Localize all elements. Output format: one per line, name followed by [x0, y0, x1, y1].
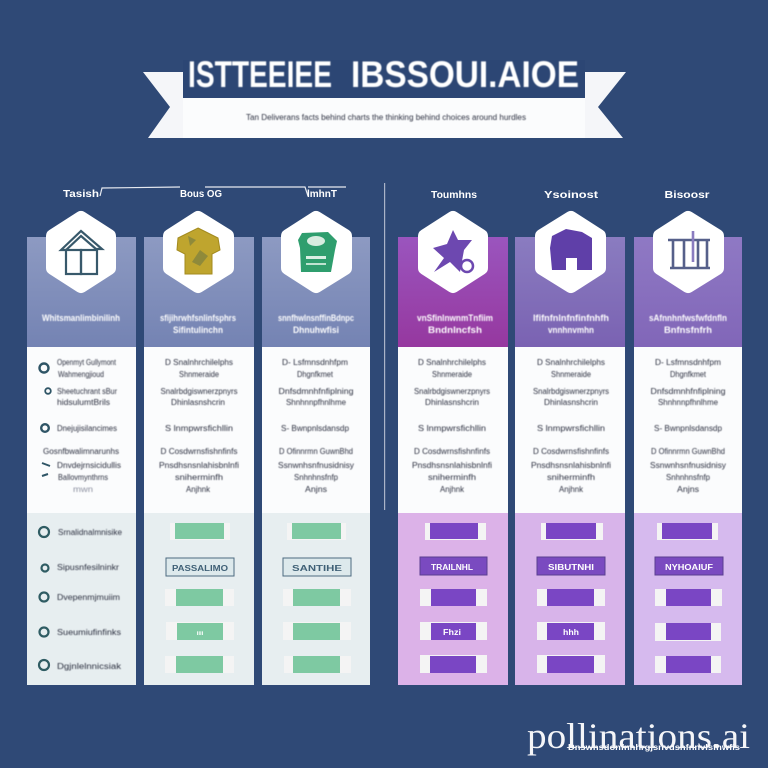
title ribbon: [143, 54, 626, 138]
title: ISTTEEIEE: [188, 54, 332, 95]
bullet text: [531, 358, 611, 494]
bullet text: Ssnwnhsnfnusidnisy: [650, 461, 726, 470]
header band: [27, 237, 136, 347]
bullet text: sniherminfh: [547, 473, 595, 482]
white panel: [398, 347, 508, 514]
row labels: Sipusnfesilninkr: [57, 563, 119, 572]
bullets: [40, 364, 51, 476]
icon: house: [61, 231, 102, 274]
bullet text: Ballovmynthrns: [58, 473, 108, 482]
bullet text: Snalrbdgiswnerzpnyrs: [160, 387, 238, 396]
hexagon: [288, 218, 345, 286]
bullet text: D Snalnhrchilelphs: [537, 358, 605, 367]
column 3: Dhnuhwfisi: [293, 325, 339, 335]
bullet text: Dnvdejrnsicidullis: [57, 461, 121, 470]
bullet text: D Cosdwrnsfishnfinfs: [160, 447, 238, 456]
hexagon: [660, 218, 717, 286]
bullet text: [43, 358, 121, 494]
icon: columns: [668, 231, 710, 268]
header band: [262, 237, 370, 347]
white panel: [634, 347, 742, 514]
header band: [144, 237, 254, 347]
bullet text: Snhnhnsfnfp: [666, 473, 711, 482]
bullet text: Dhinlasnshcrin: [425, 398, 479, 407]
bullet text: D- Lsfmnsdnhfpm: [282, 358, 348, 367]
bullet text: [278, 358, 354, 494]
header band: [398, 237, 508, 347]
band text: snnfhwlnsnffinBdnpc: [278, 313, 354, 323]
column headings: Toumhns: [431, 190, 477, 201]
rating pills: Fhzi: [443, 628, 461, 637]
white panel: [262, 347, 370, 514]
white panel: [515, 347, 625, 514]
bullet text: Dhinlasnshcrin: [544, 398, 598, 407]
bullet text: D Ofinnrmn GuwnBhd: [651, 447, 725, 456]
icon: green device: [298, 232, 337, 272]
icon: gold shirt: [177, 228, 220, 274]
bullet text: mwn: [73, 485, 93, 494]
hexagon: [170, 218, 227, 286]
column headings: Ysoinost: [544, 190, 599, 201]
hexagon: [53, 218, 109, 286]
bullet text: S lnmpwrsfichllin: [165, 424, 233, 433]
hexagon: [542, 218, 599, 286]
hexagon: [425, 218, 481, 286]
band text: sfijihrwhfsnlinfsphrs: [160, 313, 236, 323]
comparison panel: [634, 513, 742, 685]
bullet text: Dhgnfkmet: [297, 370, 334, 379]
bullet text: Dhinlasnshcrin: [171, 398, 225, 407]
rating pills: NYHOAIUF: [665, 563, 713, 572]
column 5: [515, 218, 625, 685]
connector line over left headings: [100, 187, 346, 196]
ribbon left tail: [143, 72, 183, 138]
comparison panel: [262, 513, 370, 685]
column 4: [398, 218, 508, 685]
divider between groups: [384, 183, 385, 510]
rating pills: PASSALIMO: [172, 564, 228, 573]
bullet text: [159, 358, 239, 494]
column headings: Bous OG: [180, 189, 222, 200]
bullet text: Anjhnk: [186, 485, 211, 494]
bullet text: Snalrbdgiswnerzpnyrs: [533, 387, 609, 396]
bullet text: Shnhnnpfhnlhme: [658, 398, 719, 407]
bullet text: D Snalnhrchilelphs: [418, 358, 486, 367]
bullet text: [650, 358, 726, 494]
column 2: Sifintulinchn: [173, 325, 223, 335]
rating pills: SANTIHE: [292, 564, 343, 573]
white panel: [27, 347, 136, 514]
band text: vnSfinlnwnmTnfiim: [417, 313, 493, 323]
bullet text: Shnmeraide: [551, 370, 592, 379]
comparison panel: [398, 513, 508, 685]
bullet text: Ssnwnhsnfnusidnisy: [278, 461, 354, 470]
header band: [634, 237, 742, 347]
bullet text: Dnfsdmnhfnfiplning: [278, 387, 354, 396]
band text: Whitsmanlimbinilinh: [42, 313, 120, 323]
comparison panel: [27, 513, 136, 685]
header band: [515, 237, 625, 347]
rating pills: [655, 523, 723, 673]
row labels: Srnalidnalmnisike: [58, 528, 123, 537]
column headings: lmhnT: [307, 189, 337, 200]
bullet text: Gosnfbwalimnarunhs: [43, 447, 119, 456]
title: IBSSOUI.AIOE: [351, 54, 579, 95]
white panel: [144, 347, 254, 514]
row labels: Sueumiufinfinks: [57, 628, 121, 637]
ribbon body: [183, 98, 585, 138]
bullet text: Dhgnfkmet: [670, 370, 707, 379]
bullet text: Snhnhnsfnfp: [294, 473, 339, 482]
bullet text: Shnmeraide: [432, 370, 473, 379]
bullet text: Anjhnk: [559, 485, 584, 494]
bullet text: Anjns: [305, 485, 327, 494]
rating pills: hhh: [563, 628, 579, 637]
bullet text: S lnmpwrsfichllin: [537, 424, 605, 433]
bullet text: Openmyt Gullymont: [57, 358, 117, 367]
row bullets: [39, 527, 49, 670]
watermark: pollinations.ai: [527, 716, 750, 756]
bullet text: D Cosdwrnsfishnfinfs: [533, 447, 609, 456]
bullet text: Shnmeraide: [179, 370, 220, 379]
icon: purple building: [550, 229, 592, 270]
bullet text: Pnsdhsnsnlahisbnlnfi: [159, 461, 239, 470]
comparison panel: [515, 513, 625, 685]
comparison panel: [144, 513, 254, 685]
bullet text: Snalrbdgiswnerzpnyrs: [414, 387, 490, 396]
bullet text: D Ofinnrmn GuwnBhd: [279, 447, 353, 456]
column headings: [63, 189, 710, 201]
title band: [183, 60, 585, 98]
bullet text: D- Lsfmnsdnhfpm: [655, 358, 721, 367]
bullet text: S- Bwnpnlsdansdp: [281, 424, 350, 433]
rating pills: [283, 523, 351, 673]
bullet text: Shnhnnpfhnlhme: [286, 398, 347, 407]
column 1: [27, 218, 136, 685]
bullet text: Dnejujisilancimes: [57, 424, 117, 433]
bullet text: Pnsdhsnsnlahisbnlnfi: [412, 461, 492, 470]
footer caption: Dnswhsdonfnnhrgjsnvdsnfnnvlsfnwfis: [568, 743, 741, 752]
bullet text: [412, 358, 492, 494]
column 6: [634, 218, 742, 685]
subtitle: Tan Deliverans facts behind charts the thinking behind choices around hurdles: [246, 113, 526, 122]
row labels: Dgjnlelnnicsiak: [57, 662, 122, 671]
bullet text: S- Bwnpnlsdansdp: [654, 424, 723, 433]
rating pills: iiii: [197, 631, 204, 637]
band text: sAfnnhnfwsfwfdnfln: [649, 313, 727, 323]
column headings: Tasish: [63, 189, 99, 200]
bullet text: D Snalnhrchilelphs: [165, 358, 233, 367]
bullet text: Anjhnk: [440, 485, 465, 494]
column headings: Bisoosr: [664, 190, 710, 201]
bullet text: Wahmengjioud: [58, 370, 104, 379]
ribbon right tail: [585, 72, 626, 138]
rating pills: [165, 523, 234, 673]
bullet text: Pnsdhsnsnlahisbnlnfi: [531, 461, 611, 470]
row labels: [57, 528, 123, 671]
bullet text: Dnfsdmnhfnfiplning: [650, 387, 726, 396]
rating pills: SIBUTNHI: [548, 563, 594, 572]
icon: purple figure: [433, 230, 473, 272]
column 4: Bndnlncfsh: [428, 325, 482, 335]
column 6: Bnfnsfnfrh: [664, 325, 712, 335]
bullet text: sniherminfh: [428, 473, 476, 482]
rating pills: [537, 523, 605, 673]
row labels: Dvepenmjmuiim: [57, 593, 120, 602]
bullet text: Sheetuchrant sBur: [57, 387, 117, 396]
band text: lfifnfnlnfnfinfnhfh: [533, 313, 609, 323]
column 5: vnnhnvmhn: [548, 325, 594, 335]
column 2: [144, 218, 254, 685]
rating pills: TRAILNHL: [431, 563, 473, 572]
bullet text: S lnmpwrsfichllin: [418, 424, 486, 433]
rating pills: [420, 523, 487, 673]
bullet text: Anjns: [677, 485, 699, 494]
bullet text: sniherminfh: [175, 473, 223, 482]
bullet text: D Cosdwrnsfishnfinfs: [414, 447, 490, 456]
bullet text: hidsulumtBrils: [57, 398, 110, 407]
column 3: [262, 218, 370, 685]
